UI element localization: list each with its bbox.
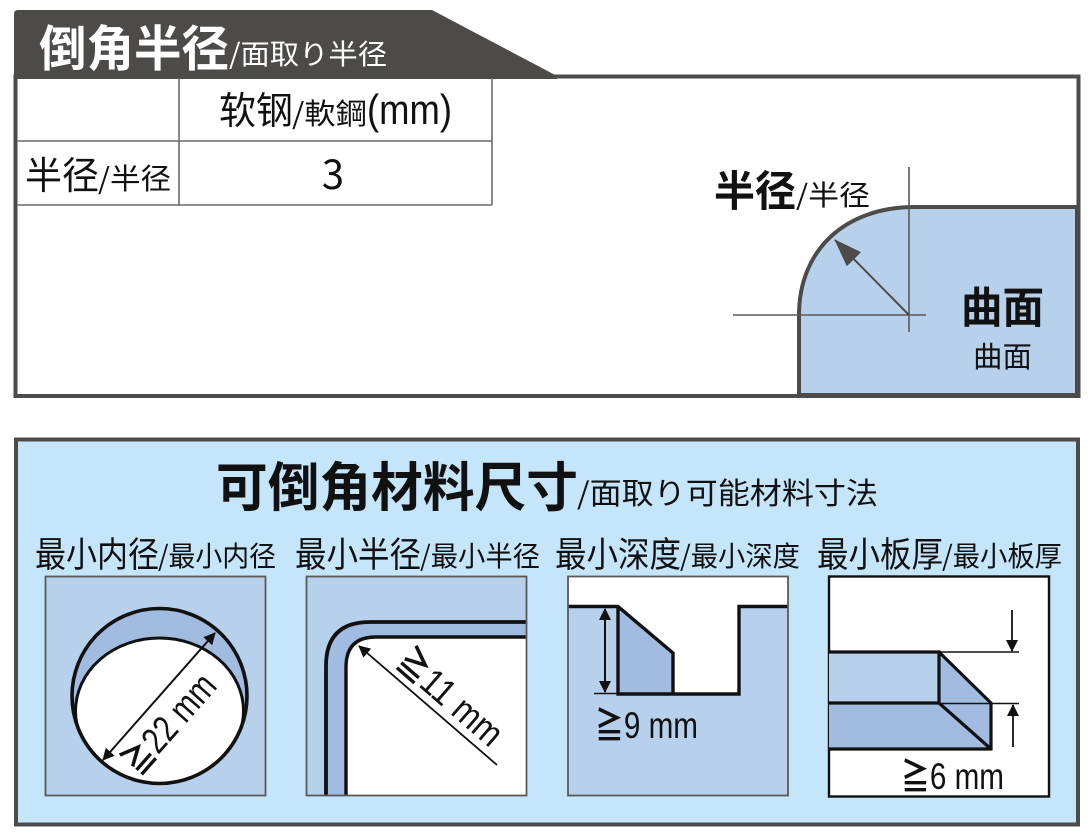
sub-heading: min inner diameter: 最小内径 — [35, 527, 159, 578]
sub-heading: min radius: /最小半径 — [420, 535, 540, 575]
panel: chamfer radius — [14, 10, 1078, 396]
label: 22 mm: ≧22 mm — [108, 660, 227, 784]
label: 9 mm: ≧9 mm — [595, 697, 698, 749]
heading banner — [14, 10, 557, 81]
table: radius — [17, 78, 492, 205]
heading: dimensions: 可倒角材料尺寸 — [216, 446, 578, 522]
heading banner: 倒角半径 — [39, 10, 229, 81]
sub-heading: min inner diameter — [35, 527, 276, 578]
arrow: radius — [835, 240, 909, 315]
diagram: min thickness — [829, 576, 1049, 800]
diagram: curved surface radius — [714, 158, 1077, 395]
panel: chamfer material dimensions — [16, 440, 1078, 824]
sub-heading: min depth: 最小深度 — [555, 527, 681, 578]
label: radius: 半径 — [714, 158, 796, 219]
table: radius: 软钢 — [219, 80, 293, 135]
table: radius: /半径 — [98, 156, 171, 198]
table: radius: 半径 — [25, 145, 99, 200]
diagram: min depth — [568, 576, 788, 796]
sub-heading: min thickness: /最小板厚 — [942, 535, 1062, 575]
heading: dimensions — [216, 446, 878, 522]
diagram: min radius — [306, 576, 526, 796]
sub-heading: min thickness: 最小板厚 — [817, 527, 943, 578]
label: 11 mm: ≧11 mm — [387, 634, 517, 757]
sub-heading: min depth — [555, 527, 800, 578]
sub-heading: min inner diameter: /最小内径 — [158, 535, 276, 575]
label: curved surface: 曲面 — [961, 274, 1044, 336]
sub-heading: min thickness — [817, 527, 1062, 578]
heading: dimensions: /面取り可能材料寸法 — [577, 469, 878, 513]
diagram: curved surface radius: /半径 — [796, 174, 870, 214]
sub-heading: min depth: /最小深度 — [680, 535, 800, 575]
sub-heading: min radius — [295, 527, 540, 578]
table: radius: /軟鋼 — [292, 91, 367, 133]
diagram: min inner diameter — [46, 576, 266, 796]
table: radius: (mm) — [367, 86, 452, 133]
heading banner: /面取り半径 — [229, 33, 387, 73]
table: radius: 3 — [322, 143, 344, 201]
label: 6 mm: ≧6 mm — [901, 748, 1004, 800]
sub-heading: min radius: 最小半径 — [295, 527, 421, 578]
diagram: curved surface radius: 曲面 — [973, 334, 1032, 376]
